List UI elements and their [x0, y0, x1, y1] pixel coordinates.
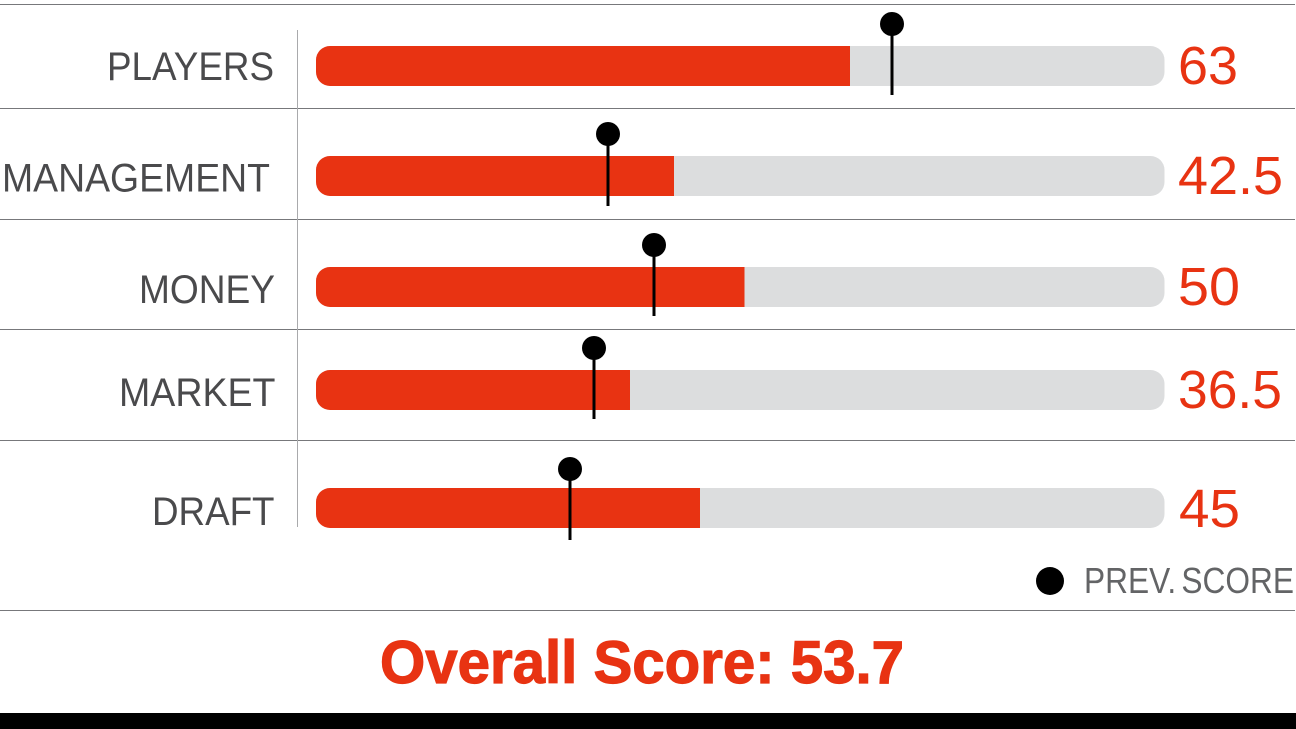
marker: market previous score [582, 336, 606, 419]
marker: draft previous score [558, 457, 582, 540]
label: management: MANAGEMENT [2, 156, 270, 200]
row: draft [152, 457, 1240, 540]
value: draft: 45 [1179, 479, 1240, 539]
row: management [2, 122, 1283, 206]
bottom black band [0, 713, 1296, 729]
label: market: MARKET [119, 371, 276, 415]
label: players: PLAYERS [107, 45, 274, 89]
bar: draft value [316, 488, 700, 528]
bar: market track [316, 370, 1164, 410]
row: money [139, 233, 1240, 317]
bar: management value [316, 156, 674, 196]
row: players [107, 12, 1238, 96]
label: draft: DRAFT [152, 490, 274, 534]
overall score: Overall Score: 53.7 [380, 629, 904, 696]
bar: draft track [316, 488, 1164, 528]
bar: players track [316, 46, 1164, 86]
marker: money previous score [642, 233, 666, 316]
value: market: 36.5 [1178, 360, 1282, 420]
marker: players previous score [880, 12, 904, 95]
bar: money value [316, 267, 744, 307]
bar: management track [316, 156, 1164, 196]
value: management: 42.5 [1178, 146, 1283, 206]
row: market [119, 336, 1282, 420]
marker: management previous score [596, 122, 620, 206]
value: money: 50 [1178, 257, 1240, 317]
value: players: 63 [1178, 36, 1238, 96]
bar: players value [316, 46, 850, 86]
bar: market value [316, 370, 630, 410]
bar: money track [316, 267, 1164, 307]
label: money: MONEY [139, 268, 275, 312]
